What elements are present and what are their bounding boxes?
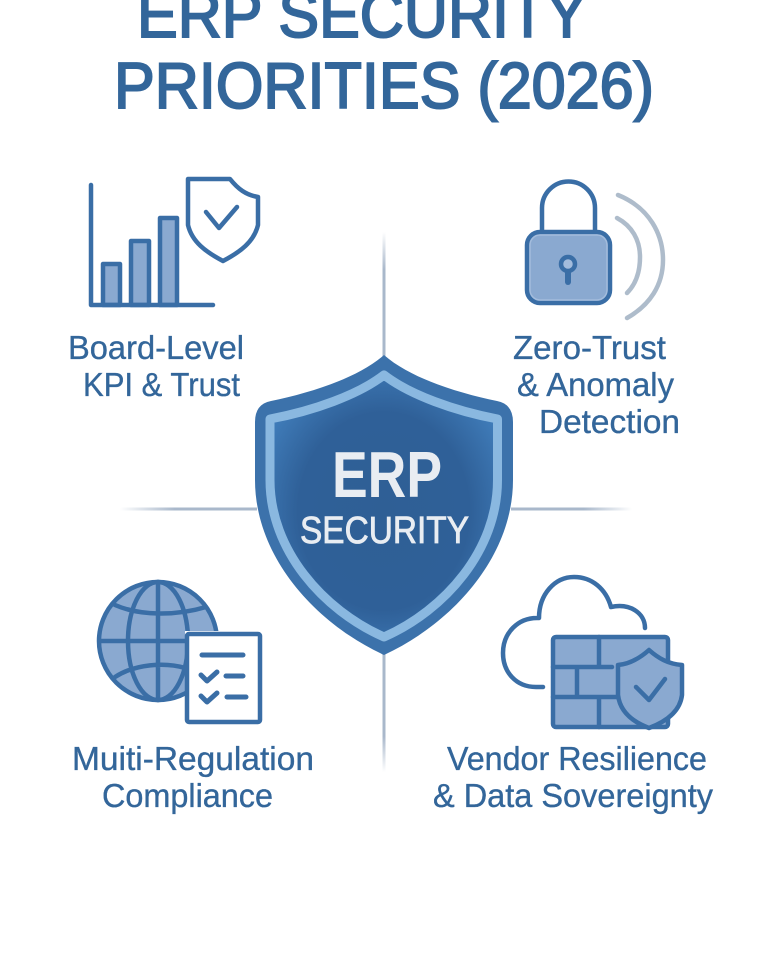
- icon: shield with check: [188, 179, 258, 261]
- icon: checklist document: [185, 631, 262, 725]
- shield label: ERP: ERP: [332, 438, 442, 511]
- panel: board-level KPI and trust: [68, 179, 258, 403]
- label: Zero-Trust & Anomaly Detection: Detection: [539, 403, 680, 440]
- panel: zero-trust and anomaly detection: [513, 182, 680, 440]
- label: Muiti-Regulation Compliance: Muiti-Regulation: [72, 740, 314, 777]
- label: Board-Level KPI & Trust: [68, 329, 244, 403]
- label: Board-Level KPI & Trust: Board-Level: [68, 329, 244, 366]
- icon: cloud: [503, 577, 645, 687]
- title: [114, 0, 654, 122]
- label: Board-Level KPI & Trust: KPI & Trust: [83, 366, 240, 403]
- shield label: SECURITY: SECURITY: [300, 510, 469, 552]
- panel: vendor resilience and data sovereignty: [433, 577, 713, 814]
- label: Zero-Trust & Anomaly Detection: & Anomaly: [517, 366, 674, 403]
- icon: shield with check: [618, 650, 682, 728]
- label: Zero-Trust & Anomaly Detection: [513, 329, 680, 440]
- icon: brick firewall: [553, 637, 668, 727]
- label: Muiti-Regulation Compliance: Compliance: [102, 777, 273, 814]
- label: Muiti-Regulation Compliance: [72, 740, 314, 814]
- title: PRIORITIES (2026): [114, 49, 654, 122]
- icon: central shield: [255, 355, 513, 655]
- label: Vendor Resilience & Data Sovereignty: & Data Sovereignty: [433, 777, 713, 814]
- icon: signal arcs: [617, 195, 663, 318]
- label: Zero-Trust & Anomaly Detection: Zero-Trust: [513, 329, 666, 366]
- label: Vendor Resilience & Data Sovereignty: [433, 740, 713, 814]
- label: Vendor Resilience & Data Sovereignty: Vendor Resilience: [447, 740, 707, 777]
- panel: multi-regulation compliance: [72, 582, 314, 814]
- icon: padlock: [527, 182, 610, 303]
- icon: bar chart with axes: [91, 185, 213, 305]
- icon: globe: [99, 582, 217, 700]
